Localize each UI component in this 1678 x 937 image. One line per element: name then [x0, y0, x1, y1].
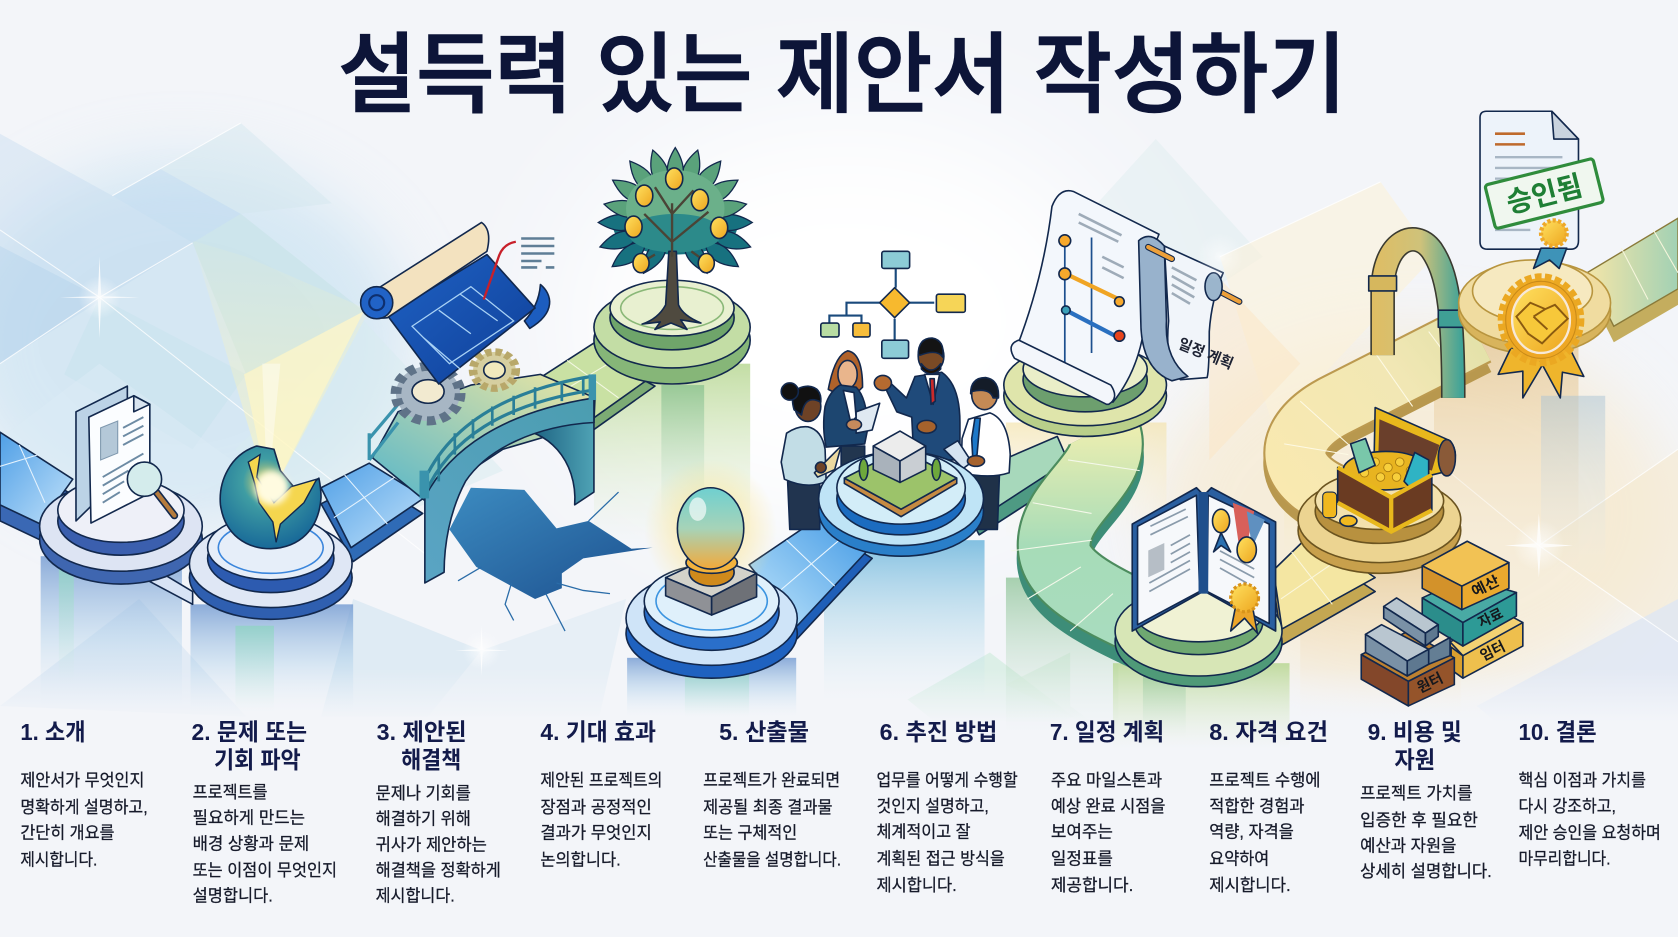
- step 1 body: 제안서가 무엇인지: [20, 771, 144, 790]
- block: steel ingots: [1366, 598, 1450, 676]
- platform 9: chest base: [1298, 472, 1461, 573]
- step 10 text: [1519, 719, 1661, 868]
- step 3 body: [376, 784, 501, 906]
- step 7 body: 제공합니다.: [1051, 876, 1133, 895]
- step 10 heading: 10. 결론: [1519, 719, 1597, 745]
- icon: flowchart: [821, 251, 965, 358]
- platform 10: seal base: [1459, 260, 1611, 354]
- person: woman with folder: [781, 383, 841, 529]
- step 9 body: 입증한 후 필요한: [1360, 811, 1478, 830]
- step 5 body: 프로젝트가 완료되면: [703, 771, 840, 790]
- background centre light: [567, 118, 1124, 524]
- step 9 text: [1360, 719, 1492, 881]
- step 7 body: 주요 마일스톤과: [1051, 771, 1162, 790]
- step 3 body: 귀사가 제안하는: [376, 835, 487, 854]
- step 1 heading: 1. 소개: [20, 719, 86, 745]
- step 9 heading: [1368, 719, 1462, 773]
- step 5 text: [703, 719, 841, 869]
- step 4 body: 장점과 공정적인: [540, 798, 652, 817]
- block: gold bottom right: [1450, 615, 1523, 678]
- step 6 body: 체계적이고 잘: [876, 823, 971, 842]
- step 3 heading: 3. 제안된: [377, 719, 467, 745]
- icon: schedule scroll: 일정 계획: [1176, 336, 1236, 373]
- path: band 2 to bridge: [321, 463, 425, 562]
- background facets: right warm: [907, 139, 1678, 856]
- path: crevice hairline cracks: [458, 492, 619, 631]
- step 6 heading: 6. 추진 방법: [880, 719, 997, 745]
- step 4 body: 논의합니다.: [540, 850, 621, 869]
- block labels: 자료: [1475, 605, 1506, 631]
- step 9 body: [1360, 784, 1492, 881]
- step 1 body: 명확하게 설명하고,: [20, 798, 148, 817]
- step 6 text: [876, 719, 1018, 895]
- step 3 heading: 해결책: [401, 747, 461, 773]
- step 6 body: 제시합니다.: [876, 876, 957, 895]
- block: brown base: [1361, 631, 1454, 706]
- step 3 body: 문제나 기회를: [376, 784, 471, 803]
- platform 6: team base: [819, 451, 983, 556]
- step 2 text: [192, 719, 337, 906]
- background fade into text area: [0, 669, 1678, 937]
- step 2 body: 필요하게 만드는: [193, 809, 305, 828]
- step 5 heading: 5. 산출물: [719, 719, 809, 745]
- path: band team to schedule: [958, 436, 1070, 535]
- step 9 body: 프로젝트 가치를: [1360, 784, 1473, 803]
- step 9 body: 예산과 자원을: [1360, 836, 1456, 855]
- icon: crystal ball on base: [666, 488, 757, 615]
- icon: gold seal with handshake: [1498, 278, 1584, 398]
- step 3 body: 해결하기 위해: [376, 810, 471, 829]
- icon: tree with golden fruit: [597, 148, 753, 329]
- glow behind crystal ball: [644, 459, 777, 600]
- path: crevice in ground: [449, 488, 653, 599]
- step 9 body: 상세히 설명합니다.: [1360, 862, 1492, 881]
- icon: approved certificate: [1480, 111, 1604, 268]
- icon: approved certificate: 승인됨: [1503, 170, 1586, 220]
- step 4 heading: 4. 기대 효과: [540, 719, 656, 745]
- icon: schedule scroll: [1011, 191, 1239, 404]
- path: bridge ramp and arch: [369, 374, 596, 583]
- step 2 body: 설명합니다.: [193, 887, 273, 906]
- icon: portfolio book with medals: [1132, 488, 1276, 633]
- background facets: left blue: [0, 123, 626, 717]
- path: left entry band: [0, 432, 73, 540]
- archway: [1369, 239, 1468, 398]
- step 8 body: 프로젝트 수행에: [1209, 771, 1321, 790]
- path: upper curve chest to seal: [1284, 332, 1477, 512]
- step 8 body: 역량, 자격을: [1209, 823, 1294, 842]
- step 7 body: 일정표를: [1051, 849, 1113, 868]
- step 3 text: [376, 719, 501, 906]
- icon: gears: [396, 352, 516, 421]
- step 2 heading: 기회 파악: [214, 747, 301, 773]
- facet light lines: [0, 123, 1678, 642]
- icon: treasure chest: [1323, 408, 1455, 532]
- light beam from cracked globe: [193, 241, 369, 497]
- block labels: [1414, 573, 1508, 697]
- step 9 heading: 9. 비용 및: [1368, 719, 1462, 745]
- step 5 body: 또는 구체적인: [703, 824, 797, 843]
- platform 4: tree base: [594, 280, 750, 384]
- step 7 text: [1050, 719, 1165, 895]
- step 7 body: 예상 완료 시점을: [1051, 797, 1165, 816]
- path: S-curve: [1011, 428, 1166, 644]
- step 8 body: 적합한 경험과: [1209, 797, 1305, 816]
- step 5 body: [703, 771, 841, 869]
- step 1 body: 간단히 개요를: [20, 824, 115, 843]
- icon: building on plot: [844, 431, 957, 517]
- step 2 heading: 2. 문제 또는: [192, 719, 307, 745]
- step 10 body: 마무리합니다.: [1519, 849, 1611, 868]
- step 4 body: [540, 771, 662, 869]
- step 5 body: 제공될 최종 결과물: [703, 798, 833, 817]
- platform 1: [40, 478, 202, 584]
- step 3 body: 해결책을 정확하게: [376, 861, 501, 880]
- step 8 body: [1209, 771, 1321, 895]
- step 7 body: [1051, 771, 1165, 895]
- step 3 heading: [377, 719, 467, 773]
- platform 7: schedule base: [1004, 341, 1166, 436]
- step 7 heading: 7. 일정 계획: [1050, 719, 1164, 745]
- step 6 body: [876, 771, 1018, 895]
- step 4 body: 결과가 무엇인지: [540, 824, 652, 843]
- step 2 body: 배경 상황과 문제: [193, 834, 309, 853]
- step 4 text: [540, 719, 662, 869]
- block labels: 예산: [1469, 573, 1502, 600]
- path: band ball to team platform: [749, 516, 872, 639]
- step 8 body: 제시합니다.: [1209, 876, 1291, 895]
- step 10 body: 제안 승인을 요청하며: [1519, 824, 1661, 843]
- person: woman with tablet: [824, 351, 880, 472]
- step 10 body: [1519, 771, 1661, 868]
- step 2 body: 프로젝트를: [193, 783, 268, 802]
- platform 5: crystal ball base: [626, 565, 797, 678]
- path: end band: [1587, 218, 1678, 342]
- sparkles: [60, 233, 1573, 676]
- step 7 body: 보여주는: [1051, 823, 1113, 842]
- block labels: 원터: [1414, 670, 1446, 697]
- icon: blueprint scroll: [361, 222, 554, 384]
- block: teal middle: [1422, 578, 1516, 646]
- step 6 body: 업무를 어떻게 수행할: [876, 771, 1018, 790]
- step 8 text: [1209, 719, 1328, 895]
- path: band book to chest: [1273, 534, 1375, 645]
- step 2 body: [193, 783, 337, 906]
- path: band 1 to 2: [144, 563, 193, 604]
- support columns: [41, 342, 1605, 749]
- step 3 body: 제시합니다.: [376, 887, 455, 906]
- step 1 body: 제시합니다.: [20, 850, 97, 869]
- icon: stacked resource blocks: [1361, 541, 1523, 706]
- title: 설득력 있는 제안서 작성하기: [338, 26, 1346, 124]
- step 5 body: 산출물을 설명합니다.: [703, 850, 841, 869]
- step 6 body: 계획된 접근 방식을: [876, 849, 1005, 868]
- step 9 heading: 자원: [1394, 747, 1435, 773]
- icon: cracked globe: [220, 446, 321, 549]
- path: band to tree platform: [540, 342, 655, 431]
- step 4 body: 제안된 프로젝트의: [540, 771, 662, 790]
- platform 2: [189, 516, 352, 619]
- person: man in white shirt: [944, 378, 1010, 529]
- icon: team of four people: [781, 338, 1010, 529]
- step 8 body: 요약하여: [1209, 849, 1269, 868]
- step 2 heading: [192, 719, 307, 773]
- step 1 body: [20, 771, 148, 869]
- step 1 text: [20, 719, 148, 869]
- platform 8: book base: [1115, 584, 1282, 687]
- block labels: 임터: [1478, 638, 1508, 665]
- step 6 body: 것인지 설명하고,: [876, 797, 989, 816]
- step 2 body: 또는 이점이 무엇인지: [193, 861, 337, 880]
- step 10 body: 핵심 이점과 가치를: [1519, 771, 1646, 790]
- icon: document with magnifier: [76, 386, 174, 523]
- step 8 heading: 8. 자격 요건: [1209, 719, 1328, 745]
- person: presenter man: [874, 338, 960, 460]
- step 10 body: 다시 강조하고,: [1519, 797, 1616, 816]
- block: gold top: [1422, 541, 1509, 610]
